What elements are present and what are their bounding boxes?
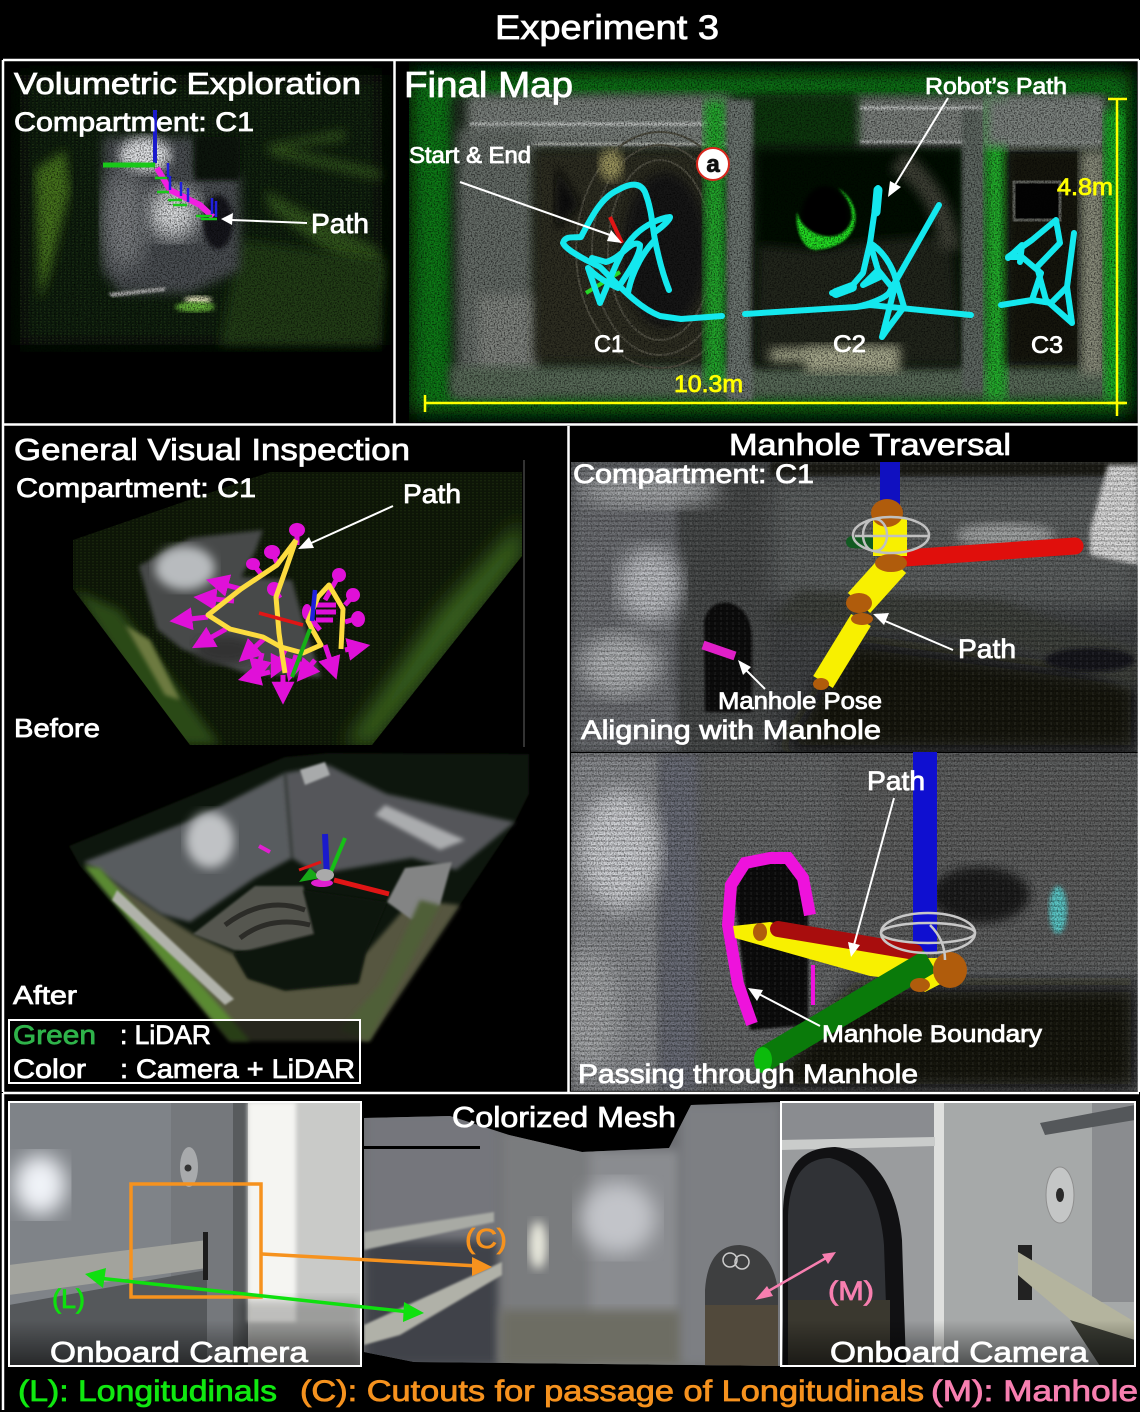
compartment labels: C2: [833, 331, 866, 358]
start & end callout: [409, 142, 622, 243]
heading: Volumetric Exploration: [14, 66, 361, 101]
yellow path: [823, 518, 895, 682]
title: Experiment 3: [495, 9, 719, 47]
green axis: [763, 961, 930, 1060]
dimension 4.8m: [1057, 99, 1127, 416]
robot's path callout: Robot’s Path: [925, 73, 1067, 99]
divider C1-C2: [704, 100, 726, 385]
compartment label: Compartment: C1: [573, 459, 814, 489]
manhole pose: [703, 645, 735, 656]
upper bands: [467, 95, 729, 147]
mesh image: [364, 1102, 781, 1366]
compartment labels: C1: [594, 331, 624, 358]
robot axes: [259, 834, 389, 894]
bottom band: [450, 366, 1115, 398]
mesh heading: Colorized Mesh: [452, 1102, 676, 1134]
orange cutout callout: (C): [465, 1223, 507, 1254]
legend row: (M): Manhole: [931, 1375, 1138, 1408]
C2 interior: [755, 148, 962, 365]
path callout: Path: [403, 479, 461, 509]
red axis: [778, 929, 915, 952]
pink manhole callout: (M): [828, 1276, 874, 1306]
green axis stub: [852, 542, 880, 544]
path callout: Path: [311, 208, 369, 239]
green longitudinal callout: [52, 1268, 424, 1322]
legend: : LiDAR: [120, 1020, 211, 1050]
robot's path callout: [888, 73, 1067, 197]
panel: final map: [397, 62, 1137, 422]
left wall: [458, 130, 534, 395]
axes: [259, 590, 315, 677]
panel: colorized mesh row: [9, 1102, 1138, 1408]
left onboard camera photo: [9, 1102, 361, 1369]
blue axis: [880, 462, 900, 512]
legend: Color: [13, 1054, 86, 1084]
manhole pose callout: Manhole Pose: [718, 688, 882, 715]
panel: general visual inspection: [9, 432, 529, 1084]
robot cage: [853, 517, 929, 553]
panel: manhole traversal: [560, 427, 1138, 1091]
caption: Passing through Manhole: [578, 1059, 918, 1089]
path joints: [813, 499, 907, 690]
path callout: [848, 766, 925, 957]
caption: Onboard Camera: [50, 1337, 309, 1369]
caption: Aligning with Manhole: [581, 715, 881, 745]
frontier viewpoints: [190, 530, 358, 684]
manhole boundary: [728, 858, 813, 1024]
robot cage: [881, 913, 975, 960]
badge a: [697, 148, 729, 180]
divider C2-C3: [962, 110, 986, 390]
path callout: Path: [867, 766, 925, 796]
caption: Onboard Camera: [830, 1337, 1089, 1369]
bottom view: passing through manhole: [560, 752, 1138, 1091]
manhole boundary callout: [748, 988, 1042, 1048]
manhole pose callout: [718, 660, 882, 715]
red axis: [905, 546, 1075, 558]
dimension 10.3m: 10.3m: [674, 371, 743, 398]
robot's path: [563, 185, 1074, 337]
yellow path: [733, 922, 958, 992]
robot axes and path: [103, 110, 217, 219]
panel: volumetric exploration: [4, 62, 392, 352]
C1 interior: [534, 150, 705, 362]
legend: : Camera + LiDAR: [120, 1054, 355, 1084]
top view: aligning with manhole: [571, 459, 1138, 752]
before scan: [70, 460, 525, 748]
legend row: [18, 1375, 1138, 1408]
before label: Before: [14, 713, 100, 743]
dimension 10.3m: [425, 371, 1125, 412]
heading: Manhole Traversal: [729, 427, 1011, 462]
legend: [9, 1020, 360, 1084]
blue axis: [913, 752, 937, 952]
path callout: [873, 613, 1016, 664]
heading: General Visual Inspection: [14, 432, 410, 467]
compartment labels: [594, 331, 1063, 359]
start & end callout: Start & End: [409, 142, 531, 168]
viewpoint discs: [246, 523, 365, 627]
C3 interior: [1007, 150, 1082, 365]
legend row: (C): Cutouts for passage of Longitudinals: [300, 1375, 924, 1408]
heading: Final Map: [404, 64, 573, 105]
compartment label: Compartment: C1: [14, 107, 254, 137]
green longitudinal callout: (L): [52, 1284, 85, 1314]
start marker: [610, 217, 622, 243]
pink manhole callout: [755, 1252, 874, 1306]
inspection path: [208, 540, 343, 673]
badge a: a: [706, 151, 720, 178]
manhole boundary callout: Manhole Boundary: [822, 1021, 1042, 1048]
orange cutout callout: [131, 1184, 507, 1297]
right onboard camera photo: [781, 1102, 1135, 1369]
compartment label: Compartment: C1: [16, 473, 256, 503]
legend row: (L): Longitudinals: [18, 1375, 277, 1408]
joints: [753, 923, 967, 992]
compartment labels: C3: [1031, 332, 1063, 359]
dimension 4.8m: 4.8m: [1057, 174, 1113, 201]
after label: After: [13, 980, 77, 1010]
path callout: [298, 479, 461, 549]
path callout: Path: [958, 634, 1016, 664]
after scan: [69, 753, 529, 1041]
path callout: [221, 208, 369, 239]
legend: Green: [13, 1020, 96, 1050]
